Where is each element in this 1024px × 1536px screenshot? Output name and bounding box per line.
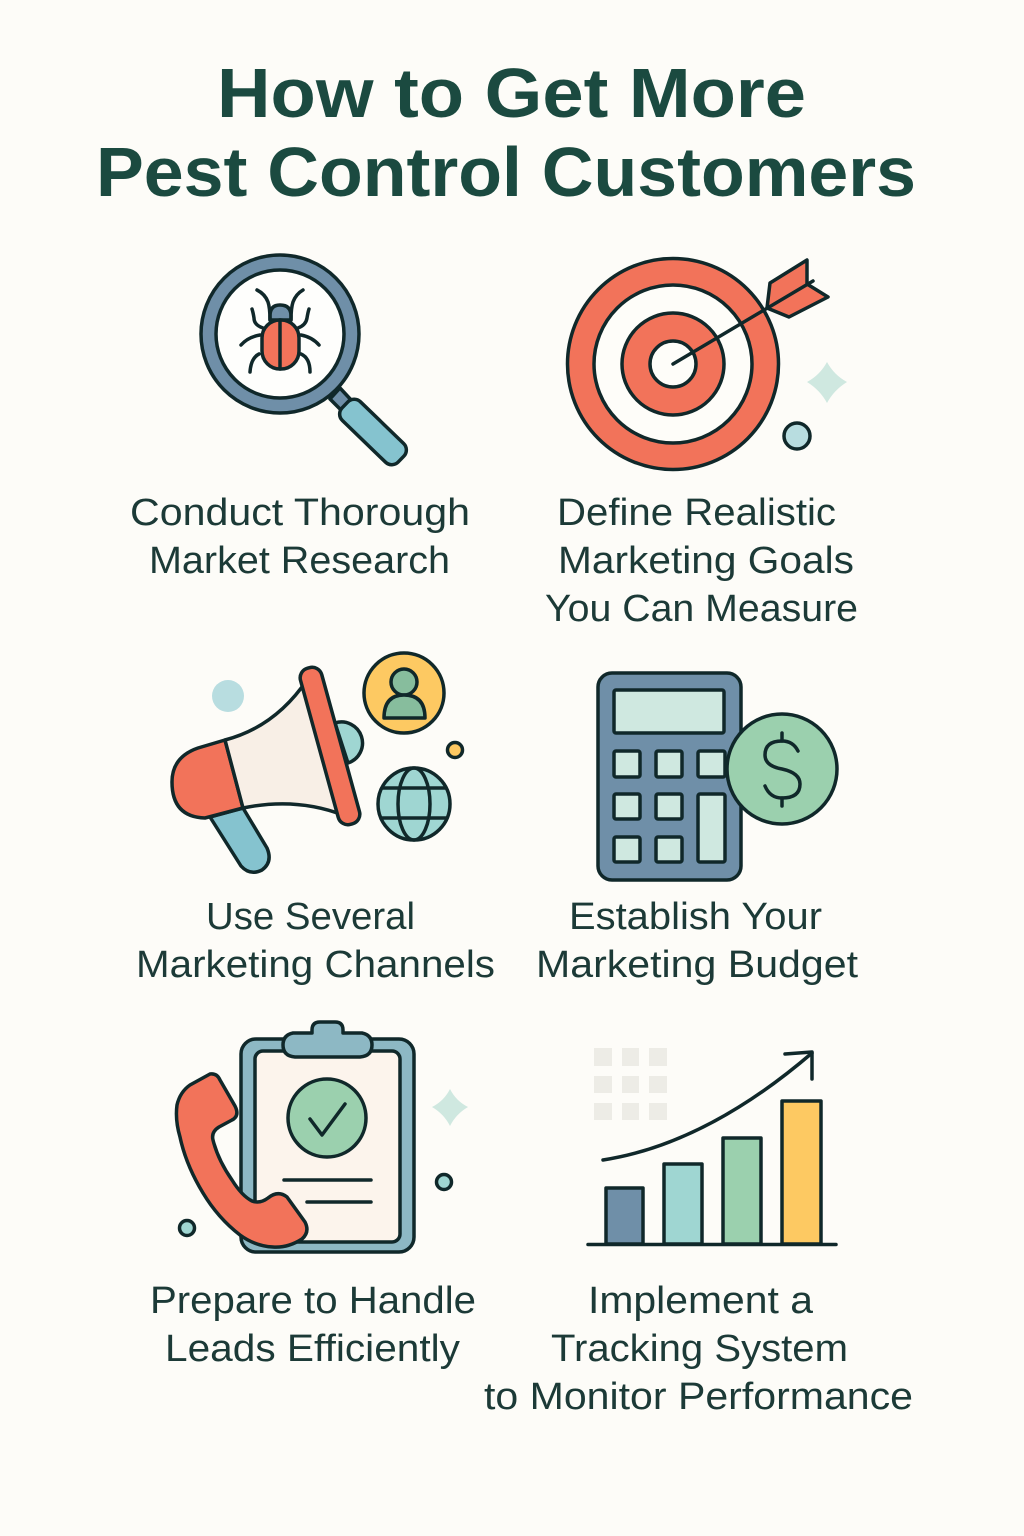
panel: handle leads [150,1022,476,1370]
label: prepare to handle leads efficiently [150,1280,476,1370]
panel: tracking system [484,1048,913,1418]
label: establish your marketing budget: Establish Your [569,896,822,938]
panel: marketing budget [536,673,858,986]
label: establish your marketing budget [536,896,858,986]
title: How to Get More [217,54,806,132]
icon: megaphone with channels [172,653,462,872]
icon: rising bar chart [588,1048,836,1244]
label: implement a tracking system: Implement a [588,1280,814,1322]
label: prepare to handle leads efficiently: Leads Efficiently [165,1328,460,1370]
icon: magnifier with bug [201,255,410,468]
label: implement a tracking system [484,1280,913,1418]
title: Pest Control Customers [96,133,916,211]
icon: target with arrow [568,258,847,470]
label: define realistic marketing goals: You Can Measure [545,588,858,630]
label: implement a tracking system: Tracking System [551,1328,848,1370]
label: establish your marketing budget: Marketing Budget [536,944,858,986]
label: define realistic marketing goals: Marketing Goals [558,540,854,582]
label: conduct thorough market research: Conduct Thorough [130,492,470,534]
label: conduct thorough market research: Market Research [149,540,450,582]
panel: market research [130,255,470,582]
label: define realistic marketing goals [545,492,858,630]
icon: clipboard and phone [176,1022,468,1252]
label: use several marketing channels [136,896,495,986]
title [96,54,916,211]
label: conduct thorough market research [130,492,470,582]
label: implement a tracking system: to Monitor Performance [484,1376,913,1418]
panel: marketing channels [136,653,495,986]
label: use several marketing channels: Marketing Channels [136,944,495,986]
panel: marketing goals [545,258,858,630]
label: define realistic marketing goals: Define Realistic [557,492,836,534]
label: prepare to handle leads efficiently: Prepare to Handle [150,1280,476,1322]
label: use several marketing channels: Use Several [206,896,415,938]
icon: calculator and dollar coin [598,673,837,880]
